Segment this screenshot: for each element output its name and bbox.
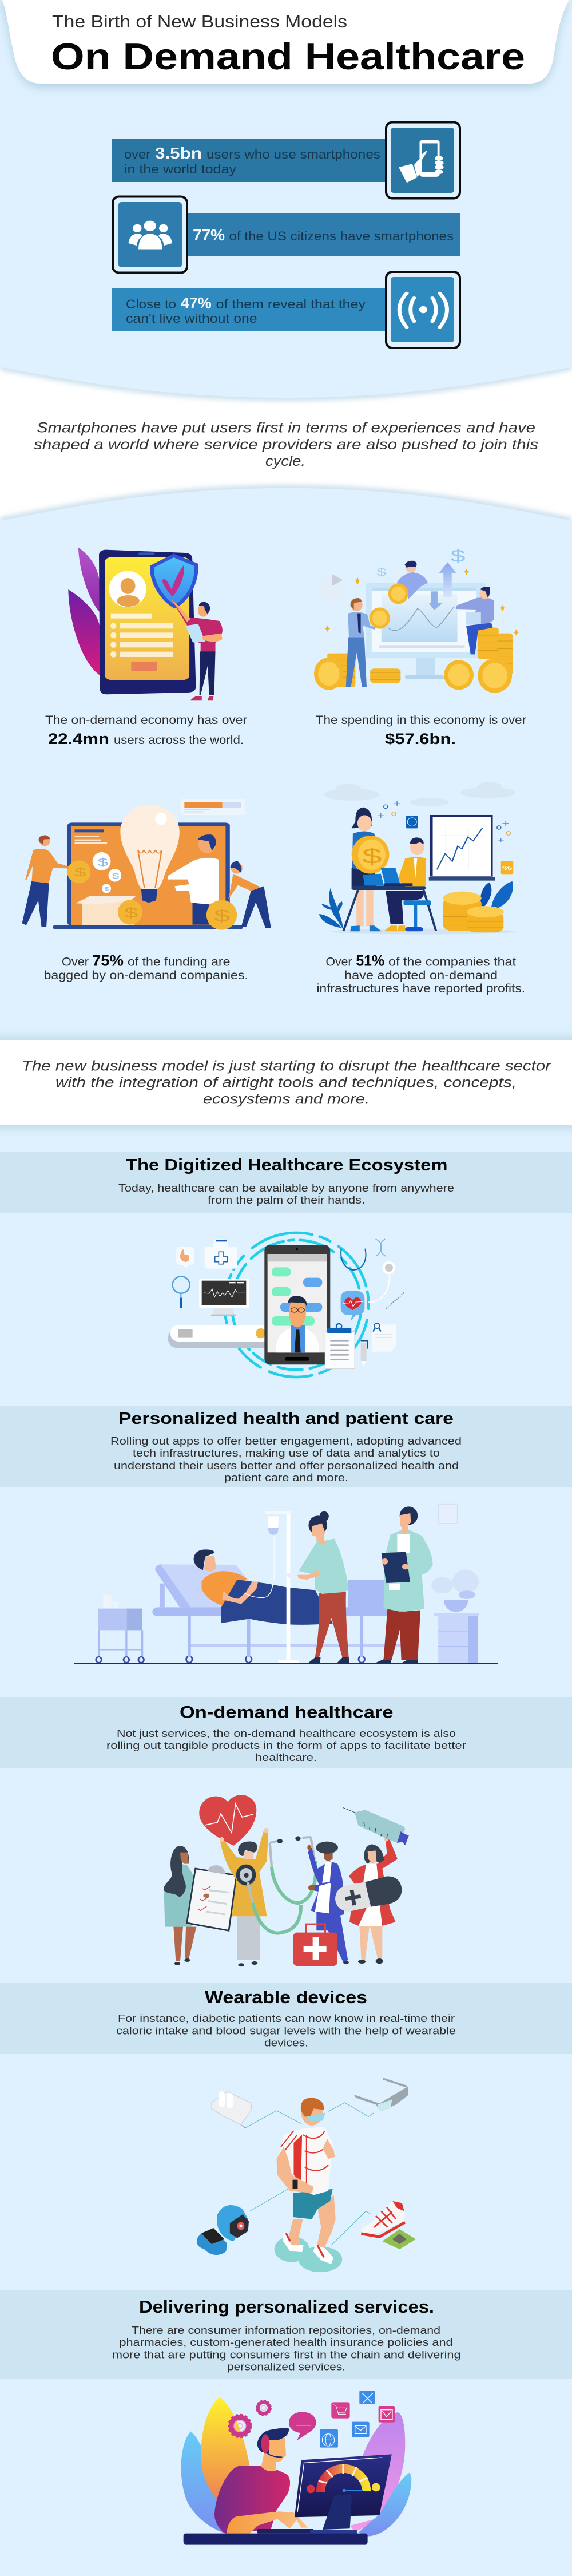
stat text [193, 226, 454, 244]
body text: understand their users better and offer personalized health and [114, 1459, 459, 1471]
body text: tech infrastructures, making use of data and analytics to [133, 1447, 440, 1459]
illustration: medical team with heart, syringe and pill [164, 1795, 409, 1966]
body text: more that are putting consumers first in the chain and delivering [112, 2349, 461, 2360]
illustration: light bulb on laptop [22, 799, 271, 930]
stat text [124, 144, 380, 176]
body text: personalized services. [227, 2361, 345, 2373]
statement text: ecosystems and more. [203, 1091, 370, 1107]
stat text: of them reveal that they [216, 297, 366, 311]
caption: funding: of the funding are [128, 956, 230, 968]
icon: signal [386, 272, 460, 348]
statement text: shaped a world where service providers are also pushed to join this [34, 437, 538, 453]
illustration: light bulb on laptop: $ [74, 866, 86, 880]
body text [112, 2325, 461, 2373]
section band: on-demand healthcare [0, 1697, 572, 1768]
stat text: in the world today [124, 162, 236, 176]
caption: funding: 75% [92, 952, 124, 970]
icon: sneaker [361, 2201, 405, 2237]
caption: on-demand users: 22.4mn [48, 730, 109, 747]
caption: profits: Over [326, 956, 352, 968]
main title: On Demand Healthcare [51, 35, 525, 77]
caption: on-demand users [45, 714, 247, 747]
stat text: 47% [181, 294, 212, 312]
illustration: light bulb on laptop: $ [214, 906, 230, 925]
heading: On-demand healthcare [180, 1703, 394, 1722]
illustration: runner with wearable devices [197, 2078, 416, 2272]
statement text: Smartphones have put users first in terms of experiences and have [37, 420, 535, 436]
stat text: can't live without one [126, 311, 257, 326]
illustration: spending with monitor and coins: $ [451, 547, 466, 566]
illustration: hospital bed with nurse and doctor [74, 1504, 498, 1664]
subtitle: The Birth of New Business Models [52, 11, 347, 31]
illustration: spending with monitor and coins: $ [377, 567, 386, 579]
body text: Rolling out apps to offer better engagement, adopting advanced [110, 1435, 462, 1447]
body text [106, 1727, 466, 1763]
icon: hand holding phone [386, 122, 460, 198]
caption: profits: of the companies that [388, 956, 516, 968]
caption: profits: have adopted on-demand [344, 969, 498, 982]
caption: profits [317, 952, 525, 995]
illustration: phone with shield and man [68, 548, 223, 700]
caption: spending: The spending in this economy is over [316, 714, 526, 727]
body text: rolling out tangible products in the form of apps to facilitate better [106, 1739, 466, 1751]
section band: wearable devices [0, 1983, 572, 2054]
caption: profits: infrastructures have reported profits. [317, 982, 525, 995]
illustration: team with coins and chart: % [502, 865, 512, 872]
heading: Personalized health and patient care [118, 1410, 454, 1428]
section band: digitized ecosystem [0, 1152, 572, 1213]
illustration: support agent with satisfaction gauge [181, 2391, 411, 2545]
statement text: cycle. [265, 453, 305, 469]
heading: Delivering personalized services. [139, 2297, 434, 2317]
stat bar: US citizens [113, 197, 460, 272]
statement text [34, 420, 538, 469]
illustration: spending with monitor and coins [314, 547, 519, 693]
caption: on-demand users: users across the world. [114, 734, 244, 747]
icon: people [113, 197, 187, 272]
body text: There are consumer information repositories, on-demand [132, 2325, 440, 2336]
illustration: light bulb on laptop: $ [112, 872, 120, 880]
body text [116, 2013, 456, 2049]
caption: funding: bagged by on-demand companies. [43, 969, 248, 982]
heading: The Digitized Healthcare Ecosystem [126, 1156, 447, 1174]
illustration: light bulb on laptop: $ [124, 905, 138, 921]
stat text: over [124, 147, 150, 161]
body text: healthcare. [255, 1751, 317, 1763]
stat text: 3.5bn [155, 144, 202, 162]
caption: spending [316, 714, 526, 747]
caption: funding: Over [62, 956, 89, 968]
section band: delivering personalized services [0, 2290, 572, 2379]
illustration: team with coins and chart: $ [362, 844, 382, 868]
statement text: The new business model is just starting to disrupt the healthcare sector [22, 1058, 552, 1074]
caption: spending: $57.6bn. [385, 730, 456, 747]
statement text: with the integration of airtight tools and techniques, concepts, [55, 1075, 517, 1091]
illustration: doctor on phone [168, 1216, 404, 1394]
body text: Not just services, the on-demand healthcare ecosystem is also [117, 1727, 456, 1739]
stat bar: smartphone users [112, 122, 460, 198]
stat bar: cannot live without [112, 272, 460, 348]
white band: new business model statement [0, 1037, 572, 1129]
body text: devices. [264, 2037, 308, 2049]
statement text [22, 1058, 552, 1107]
body text [118, 1182, 454, 1206]
header card [0, 0, 569, 87]
caption: funding [43, 952, 248, 982]
body text: caloric intake and blood sugar levels with the help of wearable [116, 2025, 456, 2036]
illustration: light bulb on laptop: $ [98, 856, 108, 869]
wave panel: smartphones statement [0, 367, 572, 521]
stat text: 77% [193, 226, 225, 244]
stat text: Close to [126, 297, 176, 311]
body text: from the palm of their hands. [208, 1194, 365, 1206]
stat text: of the US citizens have smartphones [229, 229, 454, 243]
body text: For instance, diabetic patients can now know in real-time their [118, 2013, 455, 2024]
body text: patient care and more. [224, 1471, 348, 1483]
stat text [126, 294, 366, 326]
illustration: team with coins and chart [319, 782, 515, 935]
body text: Today, healthcare can be available by anyone from anywhere [118, 1182, 454, 1194]
body text [110, 1435, 462, 1483]
section band: personalized health [0, 1406, 572, 1487]
illustration: light bulb on laptop: $ [105, 886, 109, 892]
caption: profits: 51% [356, 952, 384, 970]
caption: on-demand users: The on-demand economy has over [45, 714, 247, 727]
body text: pharmacies, custom-generated health insurance policies and [119, 2337, 453, 2348]
stat text: users who use smartphones [206, 147, 380, 161]
heading: Wearable devices [205, 1987, 367, 2007]
